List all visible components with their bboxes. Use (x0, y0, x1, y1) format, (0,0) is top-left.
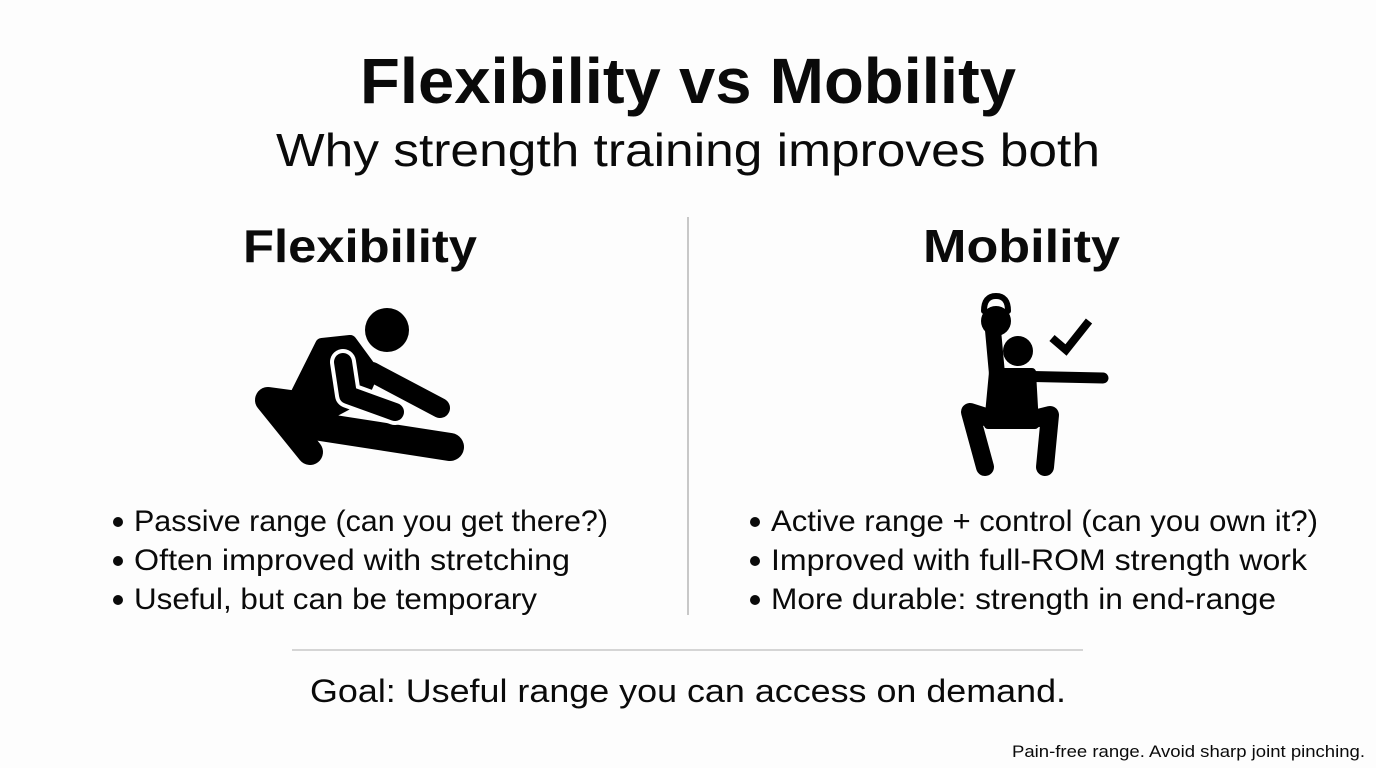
panel: flexibility (113, 220, 608, 616)
bullet list: mobility: More durable: strength in end-range (771, 583, 1276, 616)
icon: stretching figure (268, 308, 450, 452)
bullet list: flexibility: Passive range (can you get there?) (134, 505, 608, 538)
bullet list: mobility (750, 505, 1318, 616)
bullet list: mobility: Improved with full-ROM strength work (771, 544, 1308, 577)
subtitle: Why strength training improves both (276, 124, 1100, 176)
panel: mobility (750, 220, 1318, 616)
heading: Flexibility: Flexibility (243, 220, 477, 272)
bullet list: flexibility: Often improved with stretching (134, 544, 570, 577)
footer note: Pain-free range. Avoid sharp joint pinching. (1012, 742, 1365, 761)
heading: Mobility: Mobility (923, 220, 1120, 272)
bullet list: mobility: Active range + control (can you own it?) (771, 505, 1318, 538)
title: Flexibility vs Mobility (360, 45, 1016, 117)
icon: kettlebell squat figure (970, 296, 1103, 467)
bullet list: flexibility (113, 505, 608, 616)
bullet list: flexibility: Useful, but can be temporary (134, 583, 537, 616)
goal statement: Goal: Useful range you can access on demand. (310, 673, 1066, 709)
